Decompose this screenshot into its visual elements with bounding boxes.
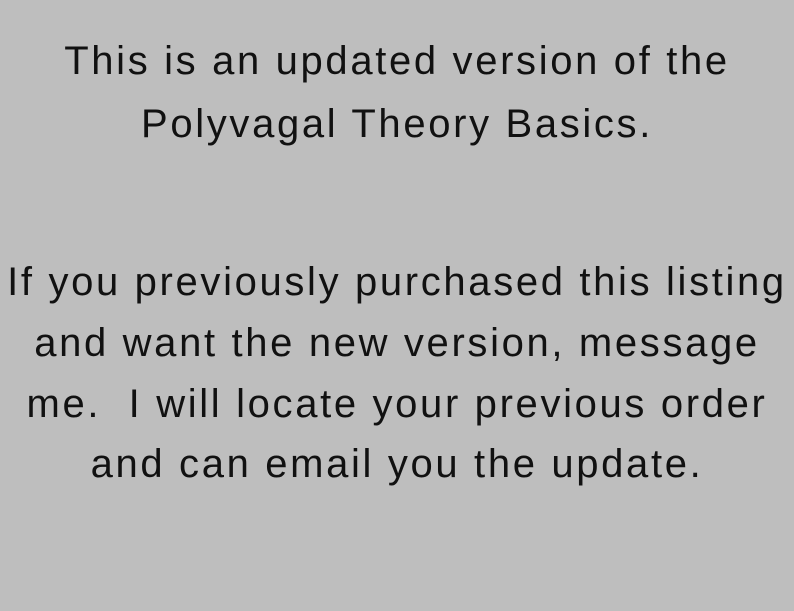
text block: message (7, 260, 787, 486)
text block: intro: Polyvagal Theory Basics. (141, 102, 653, 146)
text block: message: and can email you the update. (91, 442, 703, 486)
text block: message: and want the new version, message (34, 321, 760, 365)
text block: message: If you previously purchased this listing (7, 260, 787, 304)
text block: message: me. I will locate your previous order (27, 382, 767, 426)
text block: intro: This is an updated version of the (64, 39, 730, 83)
text block: intro (64, 39, 730, 146)
